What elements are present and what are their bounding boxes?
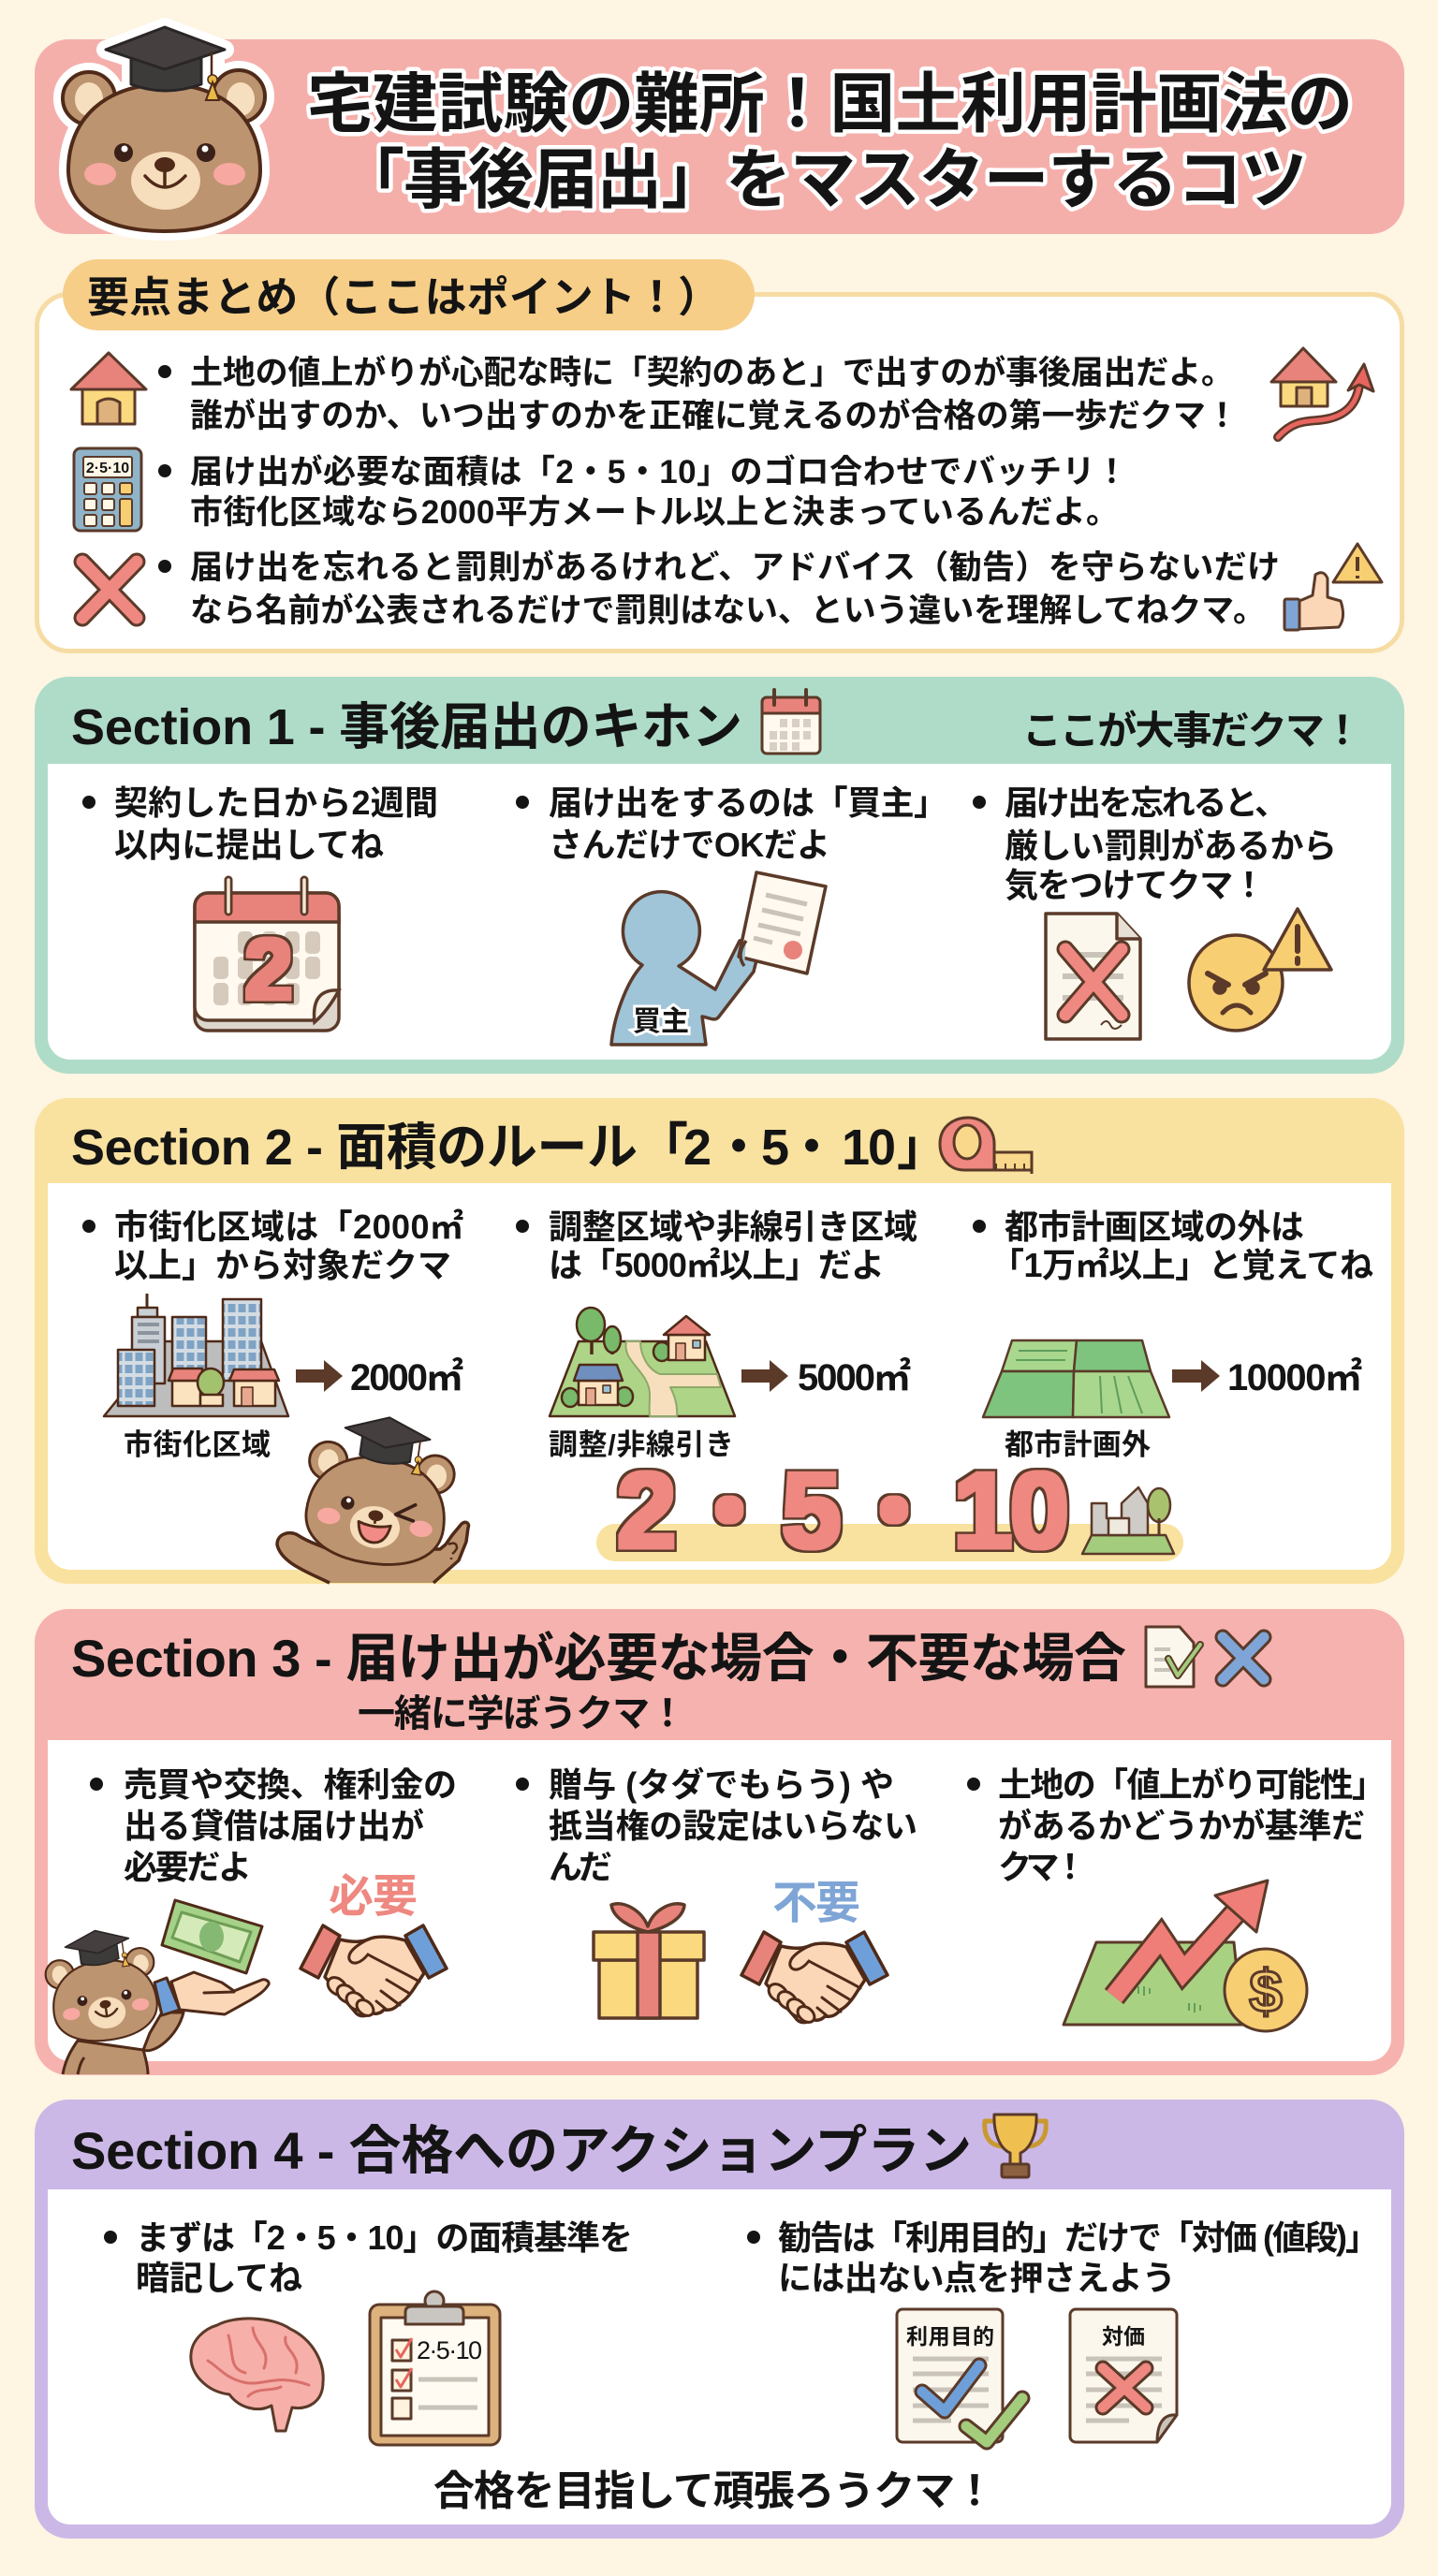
summary point 1: 土地の値上がりが心配な時に「契約のあと」で出すのが事後届出だよ。 [190, 355, 1234, 391]
summary point 2: 届け出が必要な面積は「2・5・10」のゴロ合わせでバッチリ！ [190, 453, 1128, 490]
summary point 2 [158, 453, 1128, 531]
point: criterion: 土地の「値上がり可能性」 [998, 1765, 1386, 1804]
arrow to 5000 [741, 1360, 788, 1392]
point: urbanization area [82, 1208, 463, 1284]
mnemonic: 2 5 10 [596, 1452, 1183, 1571]
point: memorize: まずは「2・5・10」の面積基準を [136, 2218, 633, 2257]
label: required: 必要 [329, 1872, 418, 1922]
icon: tape measure [940, 1118, 1032, 1174]
mascot: winking bear [277, 1408, 469, 1583]
summary point 1: 誰が出すのか、いつ出すのかを正確に覚えるのが合格の第一歩だクマ！ [190, 398, 1239, 434]
icon: purpose document [897, 2309, 1022, 2442]
icon: angry face with warning [1189, 909, 1331, 1031]
section 2 heading: 「 [638, 1120, 688, 1176]
illustration: money over hand [154, 1900, 269, 2015]
closing message: 合格を目指して頑張ろうクマ！ [433, 2468, 995, 2514]
label: urbanization area: 市街化区域 [124, 1428, 271, 1461]
arrow to 2000 [296, 1360, 343, 1392]
point: buyer: さんだけでOKだよ [549, 826, 830, 864]
section 2 heading [71, 1120, 947, 1176]
icon: small building on plot [1082, 1487, 1174, 1554]
mnemonic: 2 5 10: • [879, 1463, 909, 1557]
section 2 heading: 2 [683, 1120, 712, 1176]
point: not required cases: 贈与 (タダでもらう) や [549, 1765, 894, 1804]
point: not required cases: 抵当権の設定はいらない [549, 1807, 917, 1845]
point: penalties: 届け出を忘れると、 [1005, 783, 1288, 822]
point: buyer: 届け出をするのは「買主」 [549, 783, 947, 822]
point: advice [747, 2218, 1379, 2297]
summary heading pill: 要点まとめ（ここはポイント！） [87, 273, 720, 321]
icon: calculator [74, 448, 141, 531]
summary point 1 [158, 355, 1239, 434]
point: criterion [967, 1765, 1386, 1886]
point: memorize: 暗記してね [136, 2259, 302, 2297]
section 2 heading: Section 2 - 面積のルール [71, 1120, 638, 1176]
section 1 aside: ここが大事だクマ！ [1022, 709, 1362, 753]
value: 2000: 2000㎡ [350, 1357, 463, 1398]
icon: price document [1070, 2309, 1177, 2442]
point: advice: には出ない点を押さえよう [778, 2259, 1176, 2297]
icon: calendar with 2: 2 [244, 922, 293, 1017]
arrow to 10000 [1172, 1360, 1220, 1392]
point: penalties: 厳しい罰則があるから [1005, 827, 1337, 865]
label: purpose: 利用目的 [906, 2324, 994, 2349]
panel: section 1 [35, 677, 1404, 1074]
point: two weeks [82, 783, 438, 864]
point: penalties: 気をつけてクマ！ [1005, 866, 1266, 904]
icon: warning and thumbs up [1284, 544, 1382, 630]
illustration: rising land value [1064, 1881, 1307, 2031]
mascot: bear offering money [40, 1924, 183, 2074]
label: outside city planning: 都市計画外 [1005, 1428, 1151, 1461]
point: required cases: 必要だよ [124, 1848, 252, 1886]
summary heading pill [63, 259, 755, 330]
point: outside city planning [973, 1208, 1373, 1284]
panel: summary [37, 259, 1402, 651]
label: not required: 不要 [772, 1879, 860, 1928]
point: urbanization area: 市街化区域は「2000㎡ [114, 1208, 463, 1246]
summary point 2: 市街化区域なら2000平方メートル以上と決まっているんだよ。 [190, 494, 1119, 531]
mnemonic: 2 5 10: 10 [953, 1452, 1069, 1571]
icon: handshake required [301, 1925, 447, 2019]
mascot: bear with graduation cap [63, 27, 265, 231]
header banner [35, 27, 1404, 234]
icon: brain [191, 2319, 323, 2431]
section 3 aside: 一緒に学ぼうクマ！ [358, 1693, 686, 1734]
icon: gift [594, 1904, 704, 2018]
label: adjustment and unzoned: 調整/非線引き [549, 1428, 734, 1461]
icon: rejected document [1046, 914, 1140, 1039]
title: 宅建試験の難所！国土利用計画法の [307, 67, 1353, 140]
mnemonic: 2 5 10: • [714, 1463, 744, 1557]
point: memorize [104, 2218, 633, 2297]
icon: clipboard checklist [370, 2291, 500, 2445]
icon: checked document [1146, 1627, 1200, 1687]
panel: section 4 [35, 2100, 1404, 2539]
section 2 heading: 」 [897, 1120, 947, 1176]
icon: small calendar [762, 690, 820, 754]
section 1 heading: Section 1 - 事後届出のキホン [71, 699, 742, 755]
summary point 3: なら名前が公表されるだけで罰則はない、という違いを理解してねクマ。 [190, 593, 1266, 629]
point: two weeks: 以内に提出してね [114, 826, 384, 864]
section 4 heading: Section 4 - 合格へのアクションプラン [71, 2121, 972, 2180]
illustration: city [104, 1294, 288, 1416]
panel: section 2 [35, 1098, 1404, 1584]
icon: house with rising arrow [1271, 348, 1373, 437]
point: not required cases: んだ [549, 1848, 612, 1886]
section 2 heading: 10 [842, 1120, 896, 1176]
icon: blue cross [1223, 1637, 1264, 1679]
section 3 heading: Section 3 - 届け出が必要な場合・不要な場合 [71, 1629, 1126, 1688]
section 2 heading: ・ [713, 1120, 764, 1176]
point: advice: 勧告は「利用目的」だけで「対価 (値段)」 [778, 2218, 1379, 2257]
point: criterion: があるかどうかが基準だ [998, 1807, 1365, 1845]
icon: buyer holding document [611, 872, 826, 1045]
clipboard label: 2·5·10 [417, 2336, 482, 2364]
mnemonic: 2 5 10: 5 [782, 1452, 841, 1571]
point: adjustment area [516, 1208, 917, 1284]
icon: red cross [82, 562, 137, 618]
section 2 heading: 5 [761, 1120, 789, 1176]
icon: calendar with 2 [195, 880, 339, 1031]
label: price: 対価 [1102, 2324, 1145, 2349]
icon: trophy [985, 2115, 1046, 2177]
label: buyer: 買主 [633, 1006, 689, 1037]
point: urbanization area: 以上」から対象だクマ [114, 1246, 451, 1284]
point: criterion: クマ！ [998, 1848, 1087, 1886]
mnemonic: 2 5 10: 2 [617, 1452, 676, 1571]
title [307, 67, 1353, 216]
summary point 3 [158, 549, 1280, 629]
point: buyer [516, 783, 947, 864]
point: adjustment area: 調整区域や非線引き区域 [549, 1208, 917, 1246]
value: 10000: 10000㎡ [1227, 1357, 1362, 1398]
title: 「事後届出」をマスターするコツ [339, 143, 1307, 216]
icon: house [71, 353, 146, 424]
summary point 3: 届け出を忘れると罰則があるけれど、アドバイス（勧告）を守らないだけ [190, 549, 1280, 586]
point: outside city planning: 「1万㎡以上」と覚えてね [990, 1246, 1373, 1284]
point: not required cases [516, 1765, 917, 1886]
icon: dollar sign: $ [1249, 1957, 1283, 2025]
point: required cases [90, 1765, 457, 1886]
point: penalties [973, 783, 1337, 904]
illustration: rural land [550, 1308, 735, 1416]
section 2 heading: ・ [786, 1120, 837, 1176]
point: required cases: 出る貸借は届け出が [124, 1807, 424, 1845]
illustration: farmland [983, 1340, 1169, 1417]
point: required cases: 売買や交換、権利金の [124, 1765, 457, 1804]
point: adjustment area: は「5000㎡以上」だよ [549, 1246, 885, 1284]
icon: calculator: 2·5·10 [86, 461, 129, 476]
point: two weeks: 契約した日から2週間 [114, 783, 438, 822]
panel: section 3 [35, 1609, 1404, 2075]
icon: handshake not required [741, 1932, 888, 2026]
value: 5000: 5000㎡ [798, 1357, 911, 1398]
point: outside city planning: 都市計画区域の外は [1005, 1208, 1304, 1246]
